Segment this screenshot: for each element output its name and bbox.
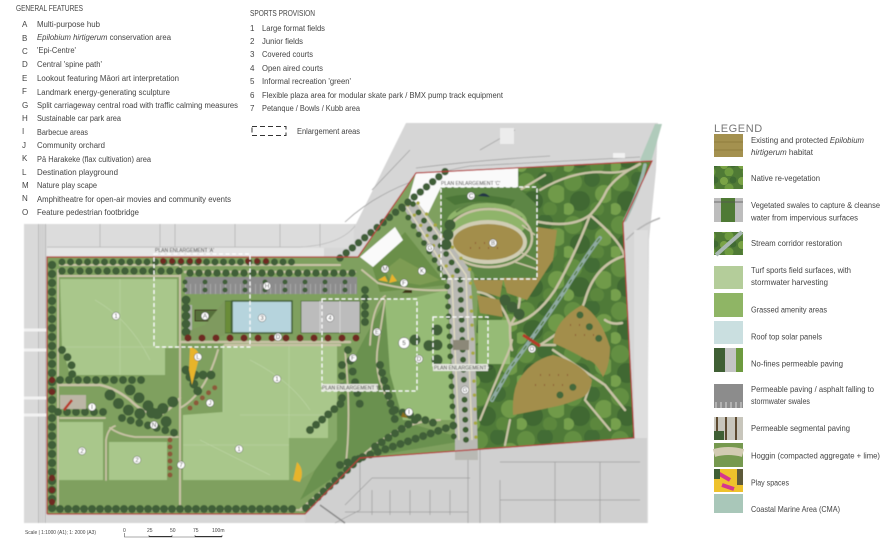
- list: general features: D: [22, 60, 28, 69]
- field 1: [60, 279, 177, 375]
- marker labels: 2: [135, 458, 139, 464]
- legend label: vegetated swales: Vegetated swales to capture & cleanse: [751, 201, 881, 210]
- large field: [183, 345, 337, 480]
- marker labels: A: [203, 314, 207, 320]
- legend label: hoggin: Hoggin (compacted aggregate + lime): [751, 452, 880, 460]
- marker labels: I: [408, 410, 410, 416]
- legend swatch: permeable asphalt: [714, 384, 743, 408]
- scale bar: 50: [170, 528, 176, 534]
- sports fields: [59, 279, 510, 480]
- enlargement labels: PLAN ENLARGEMENT 'A': [155, 248, 214, 254]
- map markers: [78, 192, 536, 469]
- list: general features: M: [22, 181, 29, 190]
- legend swatch: grassed amenity: [714, 293, 743, 317]
- legend label: habitat line two: hirtigerum habitat: [751, 148, 814, 157]
- heading: general features: GENERAL FEATURES: [16, 4, 83, 13]
- list: sports provision: 4: [250, 64, 255, 73]
- list: general features: I: [22, 127, 24, 136]
- list: sports provision: 6: [250, 91, 255, 100]
- scale bar: [123, 528, 225, 537]
- legend label: native re-vegetation: Native re-vegetation: [751, 174, 820, 183]
- marker labels: G: [428, 246, 433, 252]
- conservation meadow B: [453, 224, 523, 260]
- legend label: segmental paving: Permeable segmental paving: [751, 424, 850, 433]
- scale bar: 75: [193, 528, 199, 534]
- list: general features: F: [22, 87, 27, 96]
- marker labels: E: [375, 330, 379, 336]
- list: general features: Nature play scape: [37, 181, 98, 190]
- list: sports provision: 2: [250, 37, 255, 46]
- list: general features: B: [22, 34, 27, 43]
- marker labels: 7: [179, 463, 183, 469]
- list: sports provision: Covered courts: [262, 50, 313, 59]
- legend label: coastal marine area: Coastal Marine Area (CMA): [751, 505, 840, 514]
- list: sports provision: 3: [250, 50, 255, 59]
- red meadow dots: [470, 243, 600, 385]
- list: general features: Amphitheatre for open-air movies and community events: [37, 195, 231, 204]
- marker labels: B: [491, 241, 495, 247]
- marker labels: D: [276, 335, 281, 341]
- feature footbridge: [523, 335, 540, 346]
- marker labels: 1: [275, 377, 279, 383]
- enlargement labels: [155, 181, 500, 392]
- list: sports provision: 7: [250, 104, 255, 113]
- list: sports provision: [250, 24, 504, 113]
- list: sports provision: Informal recreation 'green': [262, 77, 351, 86]
- marker labels: C: [469, 194, 474, 200]
- list: general features: Lookout featuring Māori art interpretation: [37, 74, 179, 83]
- lawn right of road: [478, 320, 510, 364]
- car park: [185, 277, 357, 294]
- legend label: play spaces: Play spaces: [751, 478, 789, 488]
- list: general features: O: [22, 208, 28, 217]
- list: sports provision: Petanque / Bowls / Kubb area: [262, 104, 360, 113]
- legend swatch: segmental paving: [714, 417, 743, 440]
- list: sports provision: Junior fields: [262, 37, 303, 46]
- list: general features: Feature pedestrian footbridge: [37, 208, 140, 217]
- park base ground: [47, 161, 652, 514]
- list: general features: A: [22, 20, 28, 29]
- woodland lower clump: [300, 300, 470, 500]
- list: general features: Barbecue areas: [37, 128, 88, 137]
- marker labels: J: [208, 401, 212, 407]
- list: general features: Epilobium hirtigerum conservation area: [37, 33, 172, 42]
- legend label: no-fines paving: No-fines permeable paving: [751, 360, 843, 368]
- list: sports provision: Flexible plaza area for modular skate park / BMX pump track equipment: [262, 91, 504, 100]
- list: general features: Pā Harakeke (flax cultivation) area: [37, 155, 152, 164]
- site plan map: [24, 123, 662, 523]
- play spaces: [189, 274, 412, 482]
- legend swatch: stream corridor: [714, 232, 743, 255]
- courts and car park: [183, 277, 360, 345]
- list: general features: C: [22, 47, 28, 56]
- red leafed trees: [52, 261, 360, 510]
- list: general features: Multi-purpose hub: [37, 20, 101, 29]
- barbecue plaza: [60, 395, 86, 409]
- legend label: turf: Turf sports field surfaces, with: [751, 266, 851, 275]
- marker labels: H: [265, 284, 269, 290]
- scale text: Scale | 1:1000 (A1); 1: 2000 (A3): [25, 530, 96, 536]
- legend swatch: coastal marine area: [714, 494, 743, 513]
- surrounding context base: [24, 123, 662, 523]
- marker labels: O: [530, 347, 535, 353]
- marker labels: 3: [260, 316, 264, 322]
- legend swatch: vegetated swales: [714, 198, 743, 222]
- legend label: permeable asphalt line two: stormwater swales: [751, 397, 810, 406]
- enlargement labels: PLAN ENLARGEMENT 'C': [441, 181, 500, 187]
- list: general features: 'Epi-Centre': [37, 46, 76, 55]
- list: general features: K: [22, 154, 28, 163]
- legend swatch: turf: [714, 266, 743, 289]
- list: sports provision: 5: [250, 77, 255, 86]
- paths: [58, 164, 640, 510]
- scale bar: 25: [147, 528, 153, 534]
- legend label: swales line two: water from impervious surfaces: [750, 214, 858, 222]
- solar roof covered courts: [232, 301, 292, 333]
- legend label: existing habitat: Existing and protected Epilobium: [751, 136, 864, 145]
- list: general features: G: [22, 101, 28, 110]
- list: general features: Central 'spine path': [37, 60, 102, 69]
- marker labels: G: [463, 388, 468, 394]
- legend swatch: no-fines paving: [714, 348, 743, 372]
- marker labels: K: [420, 269, 424, 275]
- list: general features: Landmark energy-generating sculpture: [37, 88, 171, 97]
- marker labels: 2: [80, 449, 84, 455]
- list: general features: N: [22, 194, 28, 203]
- field 2b: [109, 442, 167, 480]
- list: general features: [22, 20, 238, 217]
- marker labels: I: [91, 405, 93, 411]
- legend swatch: hoggin: [714, 443, 743, 467]
- red site boundary: [47, 161, 652, 514]
- scale bar: 0: [123, 528, 126, 534]
- amenity grass by fields: [289, 412, 337, 480]
- amphitheatre and epi-centre: [441, 187, 540, 279]
- enlargement dashed outlines: [154, 187, 537, 391]
- marker labels: [80, 194, 535, 469]
- list: general features: Community orchard: [37, 141, 105, 150]
- marker labels: 5: [402, 341, 406, 347]
- enlargement areas key: [252, 126, 360, 136]
- legend label: stream corridor: Stream corridor restoration: [751, 239, 842, 248]
- stream corridor: [492, 165, 645, 400]
- marker labels: D: [417, 357, 422, 363]
- list: sports provision: Open aired courts: [262, 64, 323, 73]
- legend label: turf line two: stormwater harvesting: [751, 278, 828, 287]
- marker labels: 1: [237, 447, 241, 453]
- list: general features: Sustainable car park area: [37, 114, 122, 123]
- Epilobium meadows: [473, 227, 610, 415]
- forest left of road: [372, 232, 447, 292]
- open courts: [301, 301, 360, 333]
- list: general features: Split carriageway central road with traffic calming measures: [37, 101, 238, 110]
- legend swatch: solar panels: [714, 321, 743, 344]
- enlargement areas key: Enlargement areas: [297, 127, 360, 136]
- marker labels: N: [152, 423, 156, 429]
- white development pads: [360, 168, 518, 267]
- marker labels: 1: [114, 314, 118, 320]
- multi-purpose hub: [195, 310, 217, 321]
- legend swatch: play spaces: [714, 469, 743, 492]
- marker labels: M: [382, 267, 388, 273]
- enlargement labels: PLAN ENLARGEMENT 'B': [322, 386, 381, 392]
- marker labels: F: [351, 356, 355, 362]
- list: general features: L: [22, 168, 27, 177]
- enlargement labels: PLAN ENLARGEMENT 'D': [434, 366, 493, 372]
- legend label: permeable asphalt: Permeable paving / asphalt falling to: [751, 385, 875, 394]
- swale planting strip: [225, 301, 231, 333]
- field 2a: [59, 422, 103, 480]
- marker labels: F: [402, 281, 406, 287]
- list: sports provision: 1: [250, 24, 255, 33]
- legend label: solar panels: Roof top solar panels: [751, 332, 822, 342]
- marker labels: 4: [328, 316, 332, 322]
- legend label: grassed amenity: Grassed amenity areas: [751, 306, 827, 314]
- list: general features: Destination playground: [37, 168, 118, 177]
- informal green lawn: [385, 290, 453, 420]
- heading: sports provision: SPORTS PROVISION: [250, 9, 315, 18]
- list: general features: E: [22, 74, 27, 83]
- legend swatch: native re-vegetation: [714, 166, 743, 189]
- marker labels: L: [196, 355, 200, 361]
- list: sports provision: Large format fields: [262, 24, 325, 33]
- scale bar: 100m: [212, 528, 225, 534]
- list: general features: J: [22, 141, 26, 150]
- list: general features: H: [22, 114, 28, 123]
- central road with avenue trees: [403, 203, 478, 460]
- forest native revegetation: [441, 161, 652, 449]
- legend swatch: existing habitat: [714, 134, 743, 157]
- tree rows: [52, 170, 600, 510]
- orchard and pa harakeke planting: [385, 258, 440, 285]
- faint pitch lines: [60, 279, 328, 475]
- legend title: LEGEND: [714, 123, 763, 135]
